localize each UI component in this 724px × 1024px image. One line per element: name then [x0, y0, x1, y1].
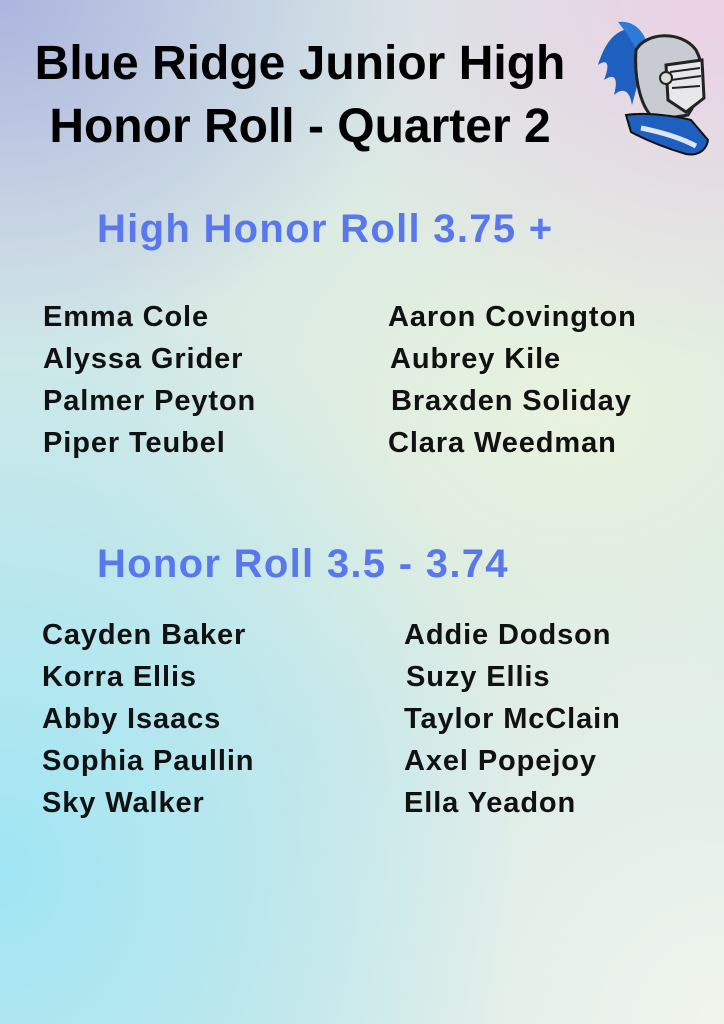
- list: high honor roll names: Braxden Soliday: [391, 385, 632, 417]
- list: high honor roll names: Aubrey Kile: [390, 343, 561, 375]
- list: high honor roll names: [43, 301, 637, 459]
- list: honor roll names: Suzy Ellis: [406, 661, 550, 693]
- list: honor roll names: Sophia Paullin: [42, 745, 254, 777]
- title: Blue Ridge Junior High: [35, 37, 565, 90]
- list: honor roll names: Taylor McClain: [404, 703, 621, 735]
- list: high honor roll names: Alyssa Grider: [43, 343, 243, 375]
- list: honor roll names: Korra Ellis: [42, 661, 197, 693]
- list: honor roll names: Axel Popejoy: [404, 745, 597, 777]
- list: honor roll names: Sky Walker: [42, 787, 205, 819]
- heading: high honor roll: High Honor Roll 3.75 +: [97, 207, 553, 251]
- list: high honor roll names: Clara Weedman: [388, 427, 617, 459]
- title: [35, 37, 565, 153]
- list: high honor roll names: Palmer Peyton: [43, 385, 256, 417]
- list: honor roll names: Cayden Baker: [42, 619, 246, 651]
- list: honor roll names: [42, 619, 621, 819]
- list: honor roll names: Abby Isaacs: [42, 703, 221, 735]
- list: high honor roll names: Emma Cole: [43, 301, 209, 333]
- list: high honor roll names: Aaron Covington: [388, 301, 637, 333]
- list: honor roll names: Ella Yeadon: [404, 787, 576, 819]
- list: honor roll names: Addie Dodson: [404, 619, 611, 651]
- icon: knight logo: [598, 22, 710, 156]
- title: Honor Roll - Quarter 2: [49, 100, 551, 153]
- heading: honor roll: Honor Roll 3.5 - 3.74: [97, 542, 509, 586]
- list: high honor roll names: Piper Teubel: [43, 427, 226, 459]
